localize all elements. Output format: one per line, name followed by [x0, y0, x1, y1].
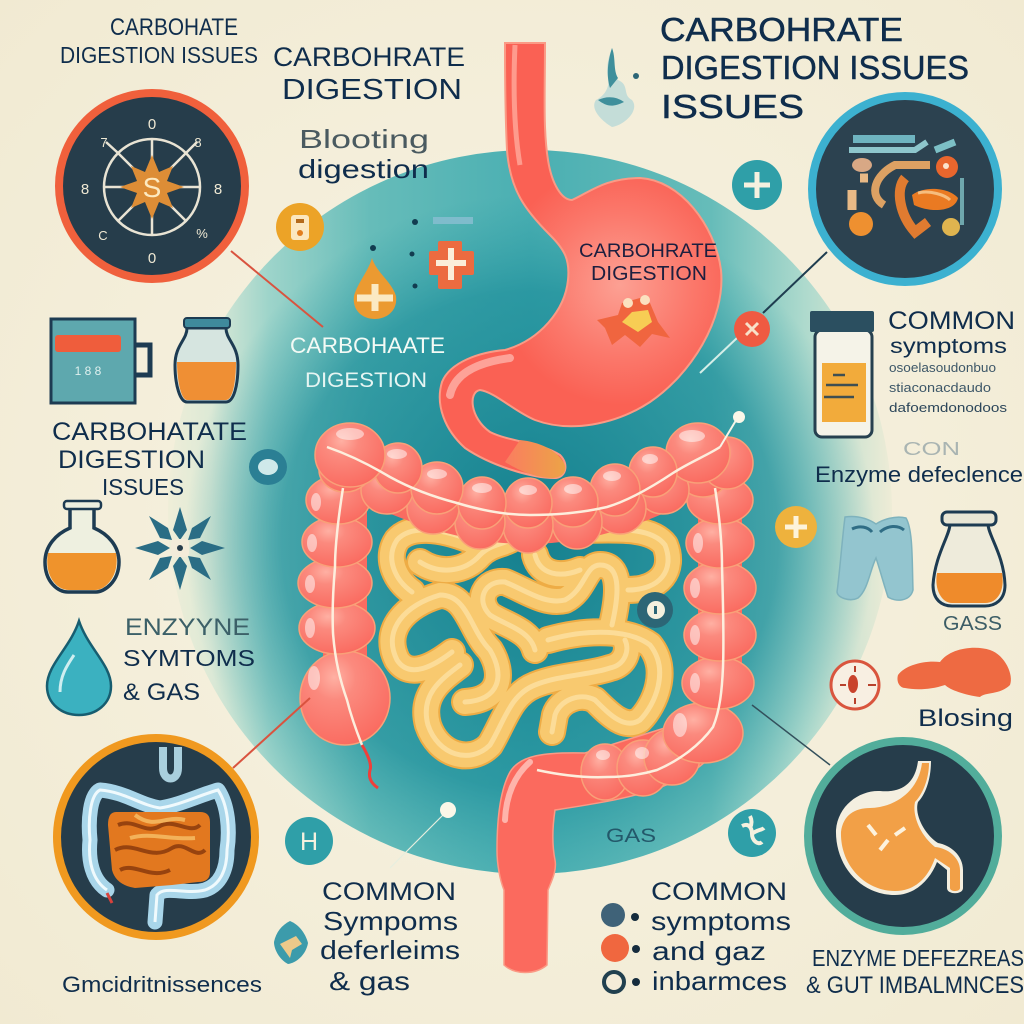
icon: flask — [45, 501, 119, 592]
icon: enzyme circle — [59, 93, 245, 279]
icon: stomach circle — [808, 741, 998, 931]
small intestine — [392, 529, 668, 755]
icon: teal badge bottom — [728, 809, 776, 857]
icon: small info badges — [249, 449, 673, 628]
icon: enzyme circle: 8 — [81, 181, 89, 198]
text block: common symptoms left: & gas — [329, 966, 410, 996]
text block: common symptoms right: inbarmces — [652, 966, 787, 996]
icon: jar — [175, 318, 238, 402]
heading: top centre left — [273, 42, 465, 184]
text block: common symptoms right: COMMON — [651, 878, 787, 906]
stomach label — [579, 241, 717, 285]
label: gas: GAS — [606, 826, 656, 847]
icon: small leaf — [274, 921, 308, 964]
colon back bands — [345, 465, 720, 730]
text block: common symptoms left: Sympoms — [323, 906, 458, 936]
icon: enzyme circle: 7 — [100, 135, 108, 150]
icon: mug — [51, 319, 150, 403]
title: top right: ISSUES — [661, 88, 804, 125]
connector lines — [231, 251, 830, 868]
label: carbohydrate digestion centre-left — [290, 333, 445, 392]
text block: common symptoms top right: symptoms — [890, 335, 1007, 358]
text block: common symptoms left: deferleims — [320, 935, 460, 965]
icon: teal plus badge — [732, 160, 782, 210]
colon white lines and appendix — [327, 417, 738, 820]
text block: common symptoms top right: COMMON — [888, 307, 1015, 335]
icon: water drop — [47, 621, 111, 715]
text block: common symptoms right: and gaz — [652, 936, 766, 966]
icon: enzyme circle: C — [98, 228, 108, 243]
title: top right: CARBOHRATE — [660, 11, 903, 48]
legend dots — [601, 903, 640, 992]
icon: enzyme circle: % — [196, 226, 208, 241]
icon: plus badge orange — [775, 506, 817, 548]
pointer dots — [440, 411, 745, 818]
icon: red x badge — [734, 311, 770, 347]
caption: enzyme deficiency bottom right — [806, 945, 1024, 999]
icon: red plus — [431, 243, 472, 287]
text block: carbohydrate digestion issues — [52, 418, 247, 500]
title: top right: DIGESTION ISSUES — [661, 49, 969, 86]
text block: carbohydrate digestion issues: ISSUES — [102, 474, 184, 500]
label: enzyme deficiency: Enzyme defeclence — [815, 462, 1023, 487]
text block: common symptoms left — [320, 878, 460, 996]
icon: enzyme circle: 0 — [148, 250, 156, 267]
icon: gut circle top right — [812, 96, 998, 282]
icon: orange badge — [276, 203, 324, 251]
label: carbohydrate digestion centre-left: CARBOHAATE — [290, 333, 445, 358]
large intestine — [298, 423, 756, 972]
text block: common symptoms top right — [888, 307, 1015, 415]
label: carbohydrate digestion centre-left: DIGESTION — [305, 369, 427, 392]
text block: common symptoms top right: osoelasoudonbuo — [889, 360, 996, 375]
decorative blot icon — [594, 48, 639, 127]
icon: glass flask right — [933, 512, 1005, 606]
icon: enzyme circle: 8 — [194, 135, 202, 150]
label: gass: GASS — [943, 613, 1002, 635]
icon: lungs shaped — [837, 517, 913, 600]
title: top right — [660, 11, 969, 125]
label: faint con: CON — [903, 439, 960, 459]
stomach label: CARBOHRATE — [579, 241, 717, 262]
colon highlights — [305, 428, 705, 760]
text block: common symptoms right — [651, 878, 791, 996]
icon: enzyme circle: S — [143, 172, 161, 203]
text block: carbohydrate digestion issues: DIGESTION — [58, 446, 205, 474]
icon: enzyme circle: 0 — [148, 116, 156, 133]
central teal circle — [168, 150, 892, 874]
heading: top left small — [60, 14, 258, 68]
text block: enzyme symptoms and gas: & GAS — [123, 679, 200, 706]
heading: top centre left: digestion — [298, 154, 429, 184]
text block: common symptoms top right: dafoemdonodoos — [889, 400, 1008, 415]
icon: H badge — [285, 817, 333, 865]
icon: supplement bottle — [810, 311, 874, 437]
heading: top left small: DIGESTION ISSUES — [60, 42, 258, 68]
icon: H badge: H — [300, 828, 318, 856]
stomach and esophagus — [440, 43, 721, 478]
icon: intestine circle — [57, 738, 255, 936]
icon: clock badge — [831, 661, 879, 709]
text block: enzyme symptoms and gas: SYMTOMS — [123, 645, 255, 671]
text block: enzyme symptoms and gas: ENZYYNE — [125, 614, 250, 641]
text block: common symptoms right: symptoms — [651, 906, 791, 936]
icon: enzyme circle: 8 — [214, 181, 222, 198]
text block: enzyme symptoms and gas — [123, 614, 255, 706]
heading: top left small: CARBOHATE — [110, 14, 238, 41]
heading: top centre left: Blooting — [299, 124, 429, 154]
text block: common symptoms top right: stiaconacdaudo — [889, 380, 991, 395]
icon: mug: 1 8 8 — [75, 364, 102, 378]
icon: red organ — [897, 648, 1011, 697]
stomach irritation mark — [597, 295, 670, 347]
text block: carbohydrate digestion issues: CARBOHATATE — [52, 418, 247, 446]
small floating dots and bar — [370, 217, 473, 288]
heading: top centre left: DIGESTION — [282, 74, 462, 106]
icon: flower — [135, 507, 225, 590]
caption: bottom left: Gmcidritnissences — [62, 972, 262, 997]
stomach label: DIGESTION — [591, 263, 707, 285]
icon: drop plus — [354, 258, 396, 319]
text block: common symptoms left: COMMON — [322, 878, 456, 906]
heading: top centre left: CARBOHRATE — [273, 42, 465, 72]
label: bloating: Blosing — [918, 705, 1013, 732]
